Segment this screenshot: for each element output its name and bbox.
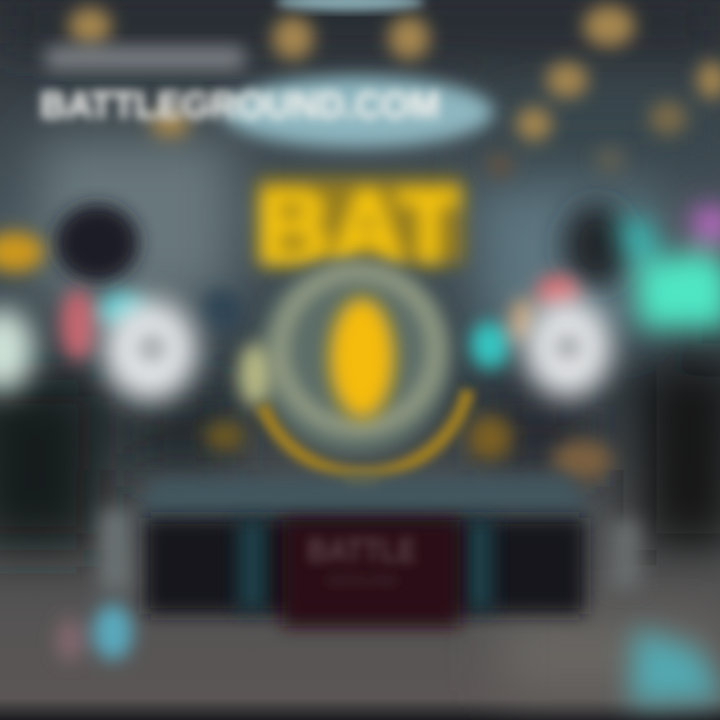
top banner glow [275,0,425,11]
podium body [145,518,585,614]
faint upper line [45,46,245,70]
chip colour accents [60,289,242,361]
chip centre [555,334,581,360]
left yellow sign [0,232,44,272]
emblem pale glow [238,343,272,407]
emblem base [344,472,380,496]
chip centre [138,334,166,362]
ceiling lights [68,5,720,178]
teal oval sign [222,76,494,148]
right dark circle [563,203,631,287]
podium text [307,532,417,590]
gold emblem [205,260,512,496]
floor reflections [56,510,640,662]
left dark circle [55,204,139,282]
chip disc [102,298,198,402]
sign heading [40,46,440,127]
emblem outer ring [262,390,468,474]
floor reflection right [630,628,720,705]
podium top [140,475,590,520]
emblem inner ring [280,272,436,428]
podium text: GROUND [326,573,398,590]
chip disc [524,298,612,398]
emblem wings [205,416,512,460]
site name: BATTLEGROUND.COM [40,85,440,127]
left white glow [0,308,34,392]
yellow title: BAT [256,169,460,287]
chip colour accents [470,274,580,369]
brown accent right [552,440,612,480]
emblem interior [257,260,453,456]
podium panel [282,520,460,626]
left chip [60,289,242,402]
teal side stripes [238,520,493,610]
podium [140,475,590,626]
podium text: BATTLE [307,532,417,570]
emblem flame [330,298,394,418]
neon shapes right [618,206,720,328]
right chip [470,274,612,398]
